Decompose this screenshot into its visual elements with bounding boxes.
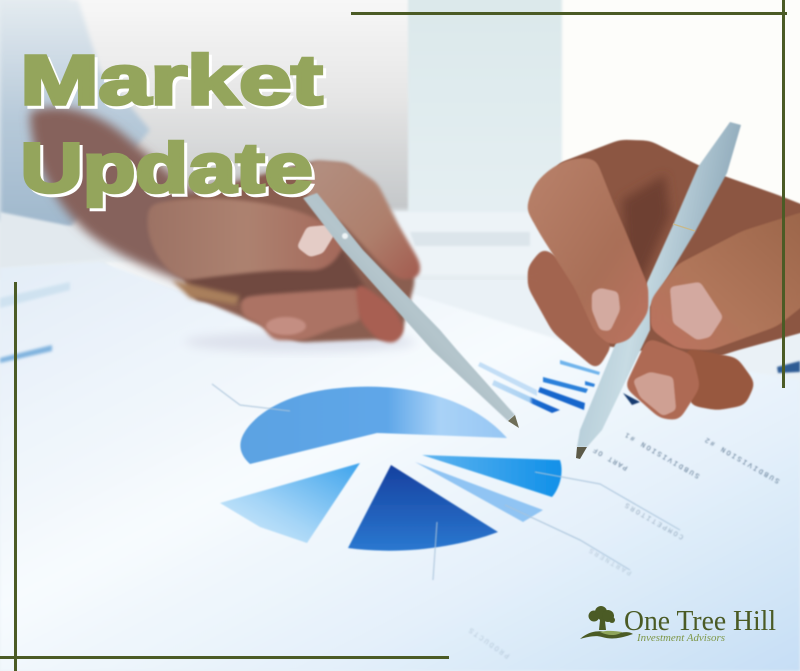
left hand under-layer [160,162,415,342]
pie slice: thin light [415,462,543,522]
right ring nail [633,372,676,416]
right pen tip [576,447,587,459]
label: partners: PARTNERS [587,545,634,576]
right ring finger [625,338,700,420]
left hand holding pen [30,107,420,344]
right middle finger [528,248,612,370]
frame: top and right lines [351,0,787,388]
title [20,41,326,210]
right index finger [527,159,648,345]
title shadow: Update [24,132,316,210]
title text: Market [20,41,322,119]
logo name: One Tree Hill [624,605,776,637]
left pen tip [508,415,519,428]
left index finger [307,160,420,280]
right pen band [673,224,695,231]
pie slice: pale left [220,463,360,543]
title shadow [24,44,326,210]
frame: left and bottom lines [0,282,449,671]
right hand front fingers [527,159,800,350]
title shadow: Market [24,44,326,122]
label: competitors: COMPETITORS [622,499,686,540]
pie slice: large [240,387,507,464]
left palm shadow [187,250,368,302]
title text [20,41,322,207]
right thumb [651,210,800,350]
pie slice: dark [348,465,498,551]
bar chart behind the pens [0,282,800,413]
logo tagline: Investment Advisors [636,633,725,644]
left thumb [148,199,343,280]
right little finger [685,348,755,410]
icon: tree [580,606,633,639]
right dark crease [622,175,670,285]
left wrist, blurred [30,107,340,300]
label: subdivision 2: SUBDIVISION #2 [702,434,782,484]
left thumb nail [297,225,337,257]
leader lines [212,384,680,580]
right pen [576,122,741,459]
paper with printed report [0,262,800,671]
label: part of: PART OF [591,444,630,471]
pie slice: mid blue [422,455,562,497]
right index nail [592,288,620,331]
small printed labels on paper [466,429,782,659]
right hand core [555,140,800,362]
right hand holding pen [528,140,800,420]
pie chart [220,387,562,551]
right thumb nail [670,282,723,340]
logo: One Tree Hill [580,605,776,644]
label: subdivision 1: SUBDIVISION #1 [622,429,702,479]
left pen [303,193,519,428]
left lower fingers [240,288,363,340]
left palm lower edge [172,280,240,305]
left pen clasp highlight [342,233,348,239]
left finger tip [355,280,405,344]
shadow under left hand [185,332,415,352]
title text: Update [20,129,312,207]
left lower nail [266,317,306,335]
label: products: PRODUCTS [466,624,512,659]
